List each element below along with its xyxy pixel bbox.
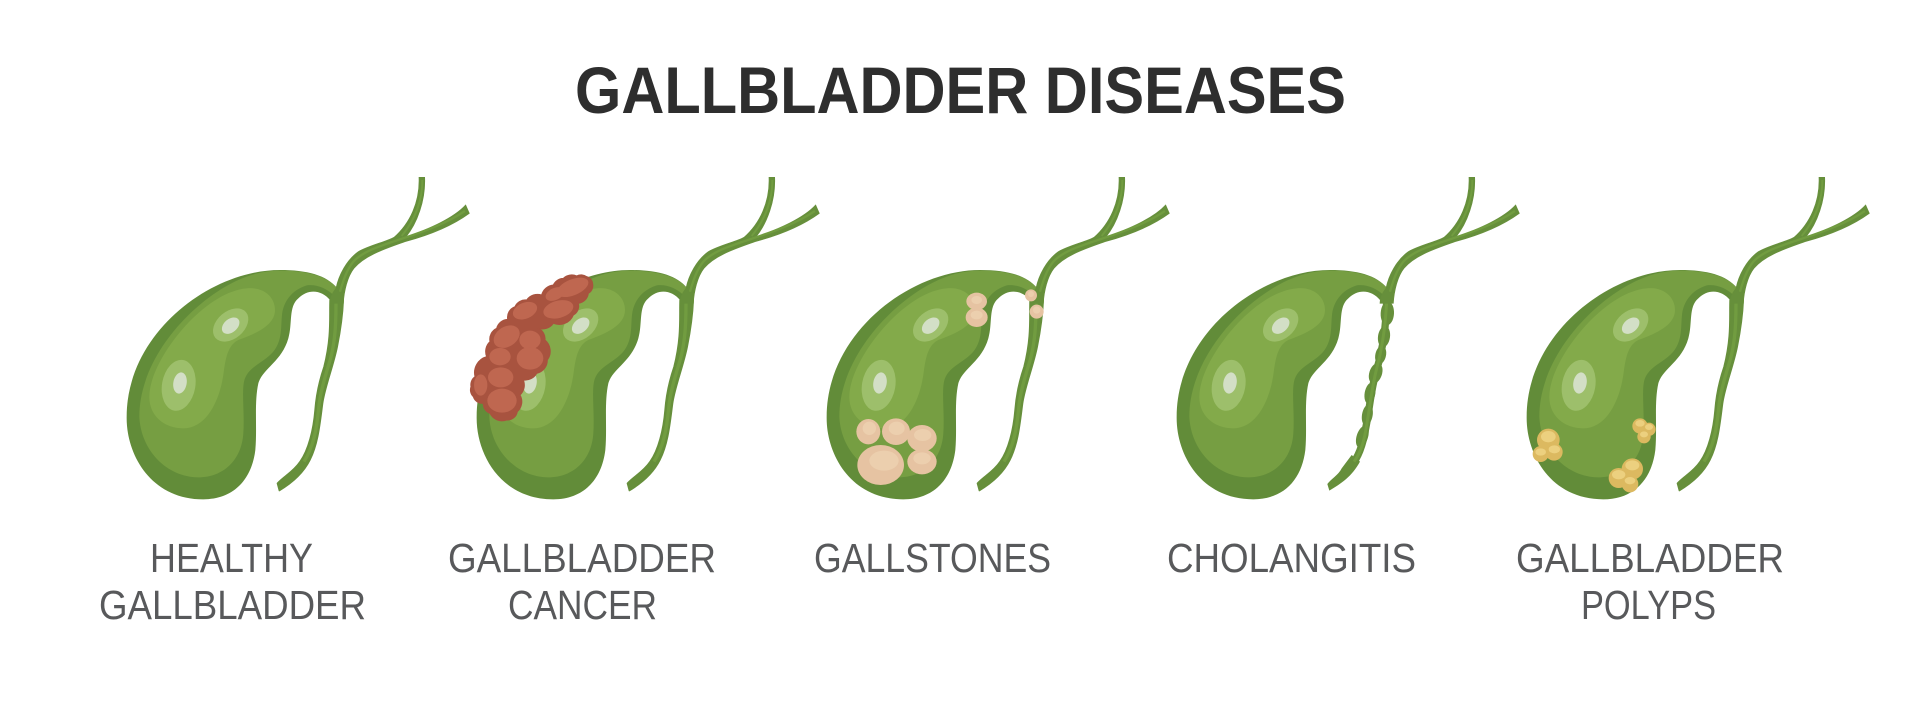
- stones: [856, 289, 1044, 485]
- label: healthy gallbladder: GALLBLADDER: [99, 582, 366, 628]
- polyps: [1533, 418, 1656, 492]
- label: gallbladder polyps: GALLBLADDER: [1516, 535, 1784, 581]
- label: gallbladder cancer: GALLBLADDER: [448, 535, 716, 581]
- label: cholangitis: CHOLANGITIS: [1167, 535, 1416, 581]
- title: GALLBLADDER DISEASES: [575, 53, 1346, 127]
- label: healthy gallbladder: [99, 535, 366, 628]
- illustration: gallbladder with inflamed duct: [1177, 177, 1519, 499]
- illustration: gallbladder with stones: [827, 177, 1169, 499]
- label: healthy gallbladder: HEALTHY: [150, 535, 313, 581]
- label: gallbladder cancer: CANCER: [508, 582, 657, 628]
- panel: gallstones: [814, 177, 1169, 581]
- label: gallstones: GALLSTONES: [814, 535, 1051, 581]
- label: gallbladder polyps: [1516, 535, 1784, 628]
- panel: gallbladder cancer: [448, 177, 819, 628]
- label: gallbladder cancer: [448, 535, 716, 628]
- panel: gallbladder polyps: [1516, 177, 1869, 628]
- label: gallbladder polyps: POLYPS: [1581, 582, 1716, 628]
- illustration: healthy gallbladder: [127, 177, 469, 499]
- illustration: gallbladder with polyps: [1527, 177, 1869, 499]
- panel: healthy gallbladder: [99, 177, 469, 628]
- tumour mass: [470, 274, 593, 421]
- illustration: gallbladder with tumour: [470, 177, 819, 499]
- panel: cholangitis: [1167, 177, 1519, 581]
